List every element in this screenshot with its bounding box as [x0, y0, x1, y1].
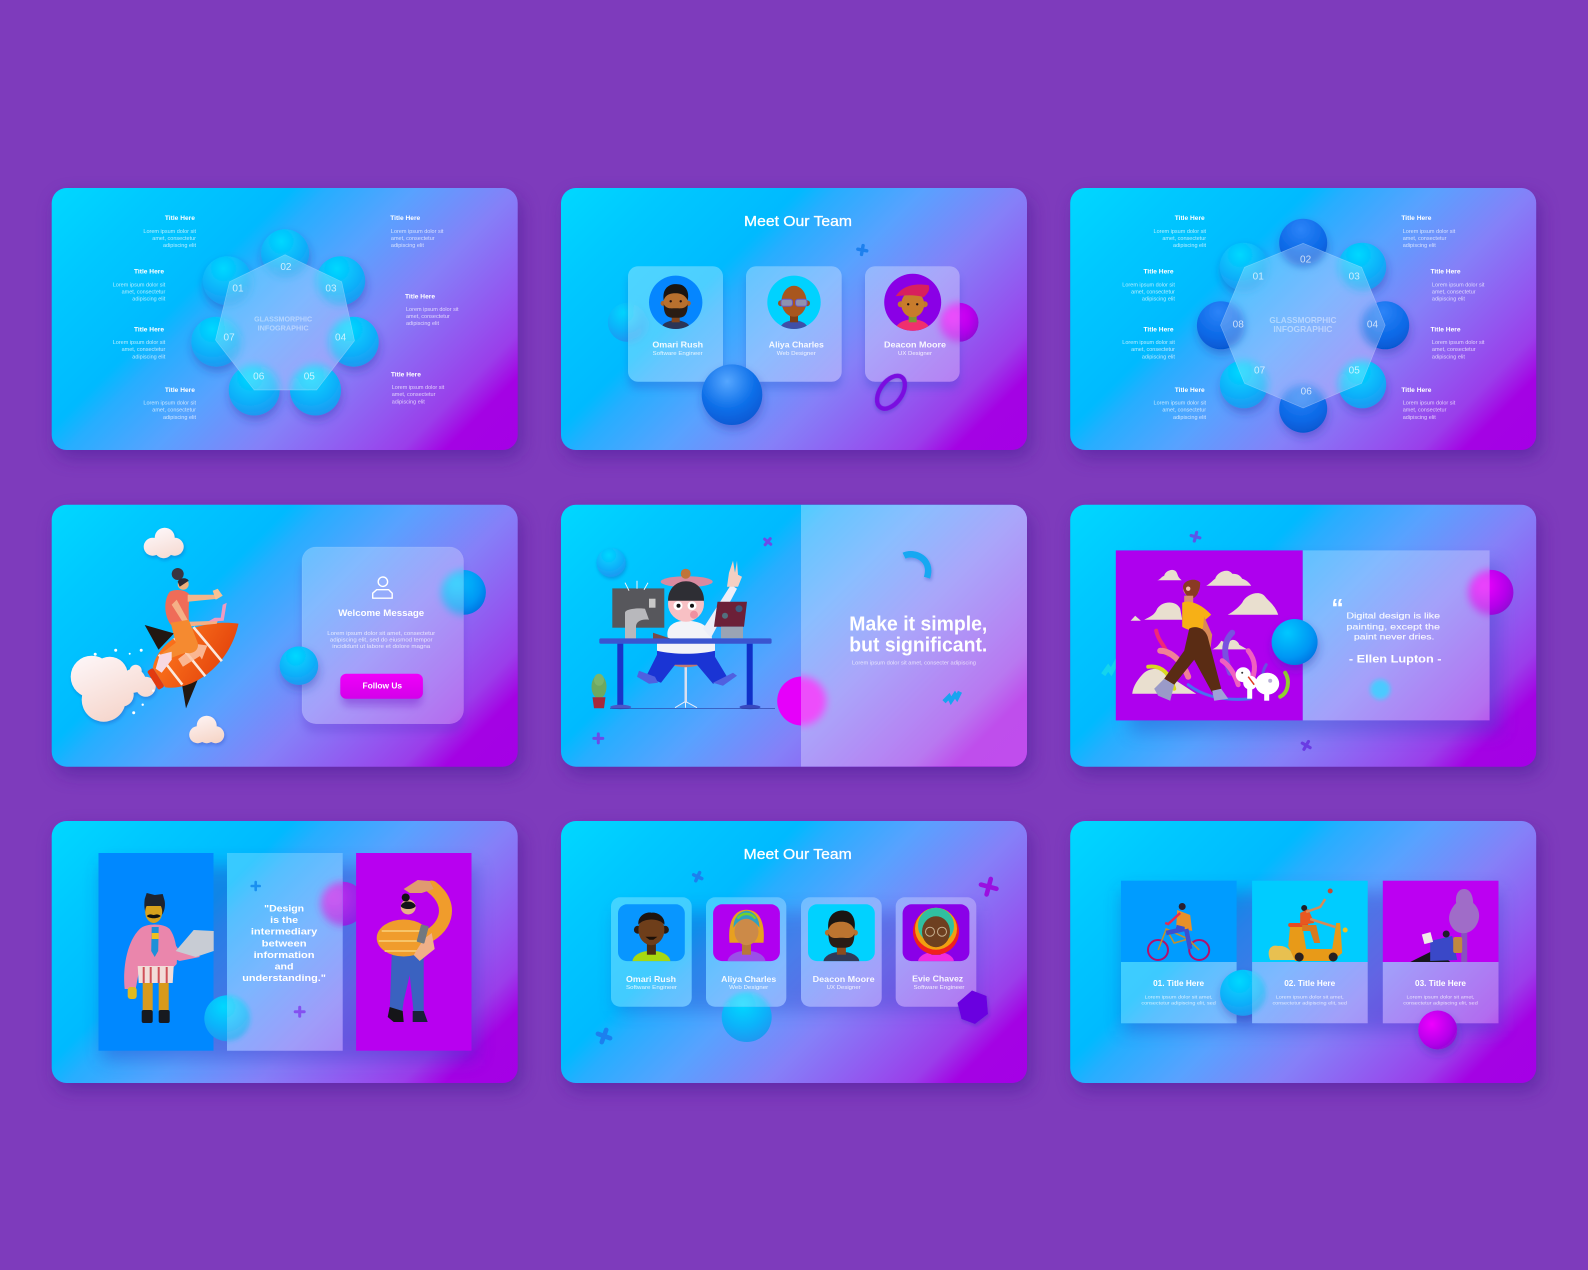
smoke dots	[94, 649, 154, 714]
card shadows	[616, 911, 976, 1011]
octagon outline and numbers	[1220, 243, 1385, 408]
right labels	[1401, 216, 1485, 421]
card 02	[1252, 880, 1368, 1024]
icon: cross	[857, 245, 868, 255]
heptagon outline and numbers: 04	[335, 333, 347, 344]
glass right panel	[801, 504, 1027, 767]
octagon outline and numbers: 02	[1300, 254, 1312, 265]
button: follow us	[340, 674, 423, 706]
card 03	[1383, 881, 1498, 1023]
shadow and soft sphere	[1130, 565, 1513, 733]
text: consectetur adipiscing elit, sed	[1141, 1000, 1216, 1006]
text: consectetur adipiscing elit, sed	[1272, 1000, 1347, 1006]
text: Lorem ipsum dolor sit amet,	[1406, 995, 1474, 1001]
name: Omari Rush	[652, 340, 703, 350]
panel shadows	[102, 865, 477, 1060]
sphere behind glass	[441, 570, 486, 615]
crosses	[252, 882, 304, 1016]
name: Aliya Charles	[769, 340, 824, 350]
avatar	[884, 274, 942, 331]
headline	[849, 614, 987, 656]
side spheres	[608, 303, 978, 342]
right labels: amet, consectetur	[1432, 290, 1476, 296]
octagon outline and numbers: 04	[1367, 319, 1378, 330]
slide 4: welcome message with rocket	[52, 505, 522, 775]
right labels: Lorem ipsum dolor sit	[1432, 282, 1485, 288]
text: consectetur adipiscing elit, sed	[1403, 1000, 1478, 1006]
name and role: Software Engineer	[914, 985, 965, 991]
left labels: Title Here	[134, 270, 165, 276]
name and role	[721, 974, 776, 991]
left labels: Lorem ipsum dolor sit	[1154, 400, 1207, 406]
decorative sphere and crosses	[594, 536, 773, 743]
right labels: amet, consectetur	[406, 314, 450, 320]
name and role: Software Engineer	[626, 985, 677, 991]
glass message panel	[300, 546, 466, 734]
headline: Make it simple,	[849, 614, 987, 636]
scooter rider	[1269, 888, 1348, 962]
card: Omari Rush	[611, 897, 692, 1007]
slide 1: seven step glass infographic	[52, 188, 522, 458]
right labels: adipiscing elit	[406, 321, 439, 327]
quote author: - Ellen Lupton -	[1349, 654, 1442, 666]
message text: incididunt ut labore et dolore magna	[332, 644, 430, 650]
slide 5: make it simple	[561, 505, 1031, 775]
heptagon outline and numbers: 02	[280, 262, 292, 273]
card: Aliya Charles	[746, 266, 842, 389]
right labels: Title Here	[1401, 216, 1432, 222]
slide 9: three numbered picture cards	[1070, 821, 1540, 1091]
magenta panel with woman	[321, 853, 472, 1051]
quote text	[242, 903, 326, 984]
right labels	[390, 216, 459, 406]
left labels: Title Here	[1143, 270, 1174, 276]
center label	[1269, 315, 1336, 334]
left labels: Lorem ipsum dolor sit	[113, 340, 166, 346]
name and role: Aliya Charles	[721, 974, 776, 984]
desk scene	[592, 561, 775, 709]
left labels: Title Here	[1175, 216, 1205, 222]
left labels: Lorem ipsum dolor sit	[1122, 282, 1175, 288]
right labels: amet, consectetur	[1432, 347, 1476, 353]
dog	[1236, 667, 1279, 701]
right labels: adipiscing elit	[1432, 354, 1465, 360]
quote text: painting, except the	[1346, 622, 1441, 631]
heptagon outline and numbers: 06	[253, 372, 265, 383]
blue sphere	[1272, 619, 1318, 665]
text: Lorem ipsum dolor sit amet,	[1276, 995, 1344, 1001]
text: Lorem ipsum dolor sit amet,	[1145, 995, 1213, 1001]
octagon outline and numbers: 06	[1301, 387, 1312, 398]
laptop	[714, 602, 747, 638]
text	[1403, 995, 1478, 1006]
heptagon outline and numbers: 03	[325, 284, 337, 295]
quote mark: “	[1331, 595, 1344, 623]
legs	[637, 643, 737, 686]
right labels: adipiscing elit	[392, 400, 425, 406]
card: Evie Chavez	[896, 897, 976, 1007]
avatar	[649, 276, 702, 329]
left labels: adipiscing elit	[163, 243, 196, 249]
left labels: amet, consectetur	[1131, 347, 1175, 353]
left labels: adipiscing elit	[163, 415, 196, 421]
name and role	[912, 974, 965, 991]
name and role: Omari Rush	[626, 974, 676, 984]
right labels: Title Here	[1430, 270, 1461, 276]
walking man	[1154, 580, 1228, 701]
title: 03. Title Here	[1415, 978, 1466, 988]
right labels: amet, consectetur	[391, 236, 435, 242]
card: Deacon Moore	[862, 266, 963, 392]
quote text: intermediary	[251, 927, 318, 938]
desk	[599, 638, 775, 709]
right labels: Lorem ipsum dolor sit	[392, 385, 445, 391]
icon: blue arc	[904, 554, 928, 578]
clouds and smoke	[71, 528, 224, 743]
name and role: Web Designer	[729, 985, 768, 991]
man	[124, 893, 214, 1023]
left labels: adipiscing elit	[1142, 354, 1175, 360]
avatar	[767, 276, 821, 329]
left labels: amet, consectetur	[122, 290, 165, 296]
left labels: Lorem ipsum dolor sit	[143, 400, 196, 406]
right labels: amet, consectetur	[1403, 236, 1447, 242]
left labels: Lorem ipsum dolor sit	[1122, 340, 1175, 346]
right labels: Title Here	[391, 373, 422, 379]
spheres	[191, 229, 379, 416]
center label: GLASSMORPHIC	[254, 314, 313, 324]
spheres	[1197, 219, 1409, 433]
right labels: Lorem ipsum dolor sit	[1432, 340, 1485, 346]
button: follow us: Follow Us	[362, 681, 403, 690]
octagon outline and numbers: 03	[1349, 272, 1360, 283]
left labels: amet, consectetur	[1162, 236, 1206, 242]
left labels: adipiscing elit	[132, 354, 166, 360]
message text	[327, 631, 436, 650]
plant	[592, 674, 606, 708]
card: Deacon Moore	[801, 897, 882, 1007]
heptagon outline and numbers: 07	[224, 333, 235, 344]
icon: user	[373, 577, 392, 598]
avatar	[713, 904, 780, 962]
purple ring	[871, 371, 911, 414]
name and role: Deacon Moore	[813, 974, 875, 984]
sphere behind card	[722, 992, 772, 1042]
avatar	[618, 904, 685, 962]
rider	[156, 568, 227, 673]
center label: INFOGRAPHIC	[1273, 324, 1332, 334]
left labels: Lorem ipsum dolor sit	[143, 229, 196, 235]
octagon outline and numbers: 05	[1349, 366, 1360, 377]
right labels: Lorem ipsum dolor sit	[391, 229, 444, 235]
name and role: Evie Chavez	[912, 974, 963, 984]
message text: Lorem ipsum dolor sit amet, consectetur	[327, 631, 436, 637]
slide 2: meet our team, three cards	[561, 188, 1031, 458]
purple hexagon	[958, 990, 988, 1024]
quote text: and	[275, 962, 294, 973]
glass quote panel	[204, 853, 343, 1051]
icon: zigzag	[944, 692, 960, 702]
text	[1272, 995, 1347, 1006]
left labels: amet, consectetur	[1162, 408, 1206, 414]
name and role: UX Designer	[827, 985, 861, 991]
right labels: adipiscing elit	[1403, 243, 1436, 249]
left labels: adipiscing elit	[1142, 296, 1175, 302]
slide 3: eight step glass infographic	[1070, 188, 1540, 458]
slide 7: three column quote	[52, 821, 522, 1091]
left labels: adipiscing elit	[1173, 415, 1207, 421]
sphere behind card 02	[1220, 970, 1266, 1016]
avatar	[808, 904, 875, 962]
right labels: Lorem ipsum dolor sit	[1403, 229, 1456, 235]
crosses and zigzag	[1103, 531, 1312, 752]
quote text: paint never dries.	[1354, 633, 1434, 642]
left labels: amet, consectetur	[1131, 290, 1175, 296]
card 01	[1121, 881, 1237, 1023]
quote text: understanding."	[242, 973, 326, 984]
heptagon outline and numbers: 05	[304, 372, 315, 383]
center label	[254, 314, 313, 332]
center label: INFOGRAPHIC	[258, 324, 309, 332]
center label: GLASSMORPHIC	[1269, 315, 1336, 325]
message text: adipiscing elit, sed do eiusmod tempor	[330, 638, 433, 644]
left labels	[1122, 216, 1207, 421]
rocket	[139, 605, 253, 708]
reader under tree	[1410, 889, 1479, 962]
front sphere	[280, 646, 318, 685]
left labels: adipiscing elit	[132, 296, 166, 302]
title: Meet Our Team	[744, 213, 852, 230]
left labels	[113, 216, 196, 421]
heptagon outline and numbers	[216, 255, 354, 390]
left labels: Title Here	[165, 216, 196, 222]
octagon outline and numbers: 07	[1254, 366, 1266, 377]
left labels: Title Here	[165, 388, 196, 394]
left labels: Title Here	[1143, 328, 1174, 334]
cyclist	[1148, 903, 1209, 960]
left labels: amet, consectetur	[152, 408, 196, 414]
left labels: Lorem ipsum dolor sit	[113, 282, 166, 288]
quote text: between	[262, 938, 307, 949]
name and role	[626, 974, 677, 991]
right labels: adipiscing elit	[1432, 296, 1465, 302]
glass quote panel	[1302, 550, 1490, 720]
left labels: Title Here	[134, 328, 165, 334]
right labels: Title Here	[1430, 328, 1461, 334]
octagon outline and numbers: 01	[1253, 272, 1264, 283]
big blue sphere	[702, 364, 762, 425]
right labels: amet, consectetur	[392, 392, 436, 398]
swirls	[1148, 631, 1288, 699]
magenta sphere behind glass	[777, 676, 826, 726]
title: 01. Title Here	[1153, 978, 1204, 988]
chair	[672, 660, 700, 708]
left labels: adipiscing elit	[1173, 243, 1207, 249]
headline: but significant.	[849, 635, 987, 657]
name: Deacon Moore	[884, 340, 946, 350]
glass octagon	[1220, 243, 1386, 408]
card: Omari Rush	[625, 266, 725, 391]
quote text: information	[254, 950, 315, 961]
card shadows	[1122, 891, 1500, 1031]
heading: Welcome Message	[338, 608, 424, 619]
card: Aliya Charles	[706, 897, 786, 1007]
title: 02. Title Here	[1284, 978, 1335, 988]
left labels: Lorem ipsum dolor sit	[1154, 229, 1207, 235]
person	[653, 561, 742, 639]
glass heptagon	[216, 254, 354, 390]
slide 6: quote with walking man	[1070, 505, 1540, 775]
left labels: amet, consectetur	[152, 236, 196, 242]
subline: Lorem ipsum dolor sit amet, consecter adipiscing	[852, 660, 976, 666]
right labels: Title Here	[1401, 388, 1432, 394]
magenta sphere	[1418, 1010, 1457, 1050]
left labels: amet, consectetur	[122, 347, 165, 353]
blue panel with man	[98, 853, 214, 1051]
text	[1141, 995, 1216, 1006]
right labels: adipiscing elit	[391, 243, 424, 249]
role: Software Engineer	[653, 351, 703, 357]
quote text: is the	[270, 915, 298, 926]
left labels: Title Here	[1175, 388, 1205, 394]
role: UX Designer	[898, 351, 932, 357]
illustration panel	[1116, 550, 1303, 720]
name and role	[813, 974, 875, 991]
woman	[377, 880, 445, 1022]
quote text: "Design	[264, 903, 304, 914]
right labels: Title Here	[390, 216, 421, 222]
heptagon outline and numbers: 01	[232, 284, 244, 295]
right labels: Lorem ipsum dolor sit	[1403, 400, 1456, 406]
monitor	[612, 581, 664, 639]
avatar	[902, 904, 970, 962]
octagon outline and numbers: 08	[1233, 319, 1244, 330]
role: Web Designer	[777, 351, 816, 357]
title: Meet Our Team	[744, 846, 852, 863]
clouds	[1131, 570, 1278, 694]
quote text: Digital design is like	[1346, 612, 1441, 621]
right labels: Title Here	[405, 294, 436, 300]
right labels: Lorem ipsum dolor sit	[406, 307, 459, 313]
right labels: adipiscing elit	[1403, 415, 1436, 421]
quote text	[1346, 612, 1441, 642]
crosses	[596, 871, 998, 1044]
slide 8: meet our team, four cards	[561, 821, 1031, 1091]
right labels: amet, consectetur	[1403, 408, 1447, 414]
